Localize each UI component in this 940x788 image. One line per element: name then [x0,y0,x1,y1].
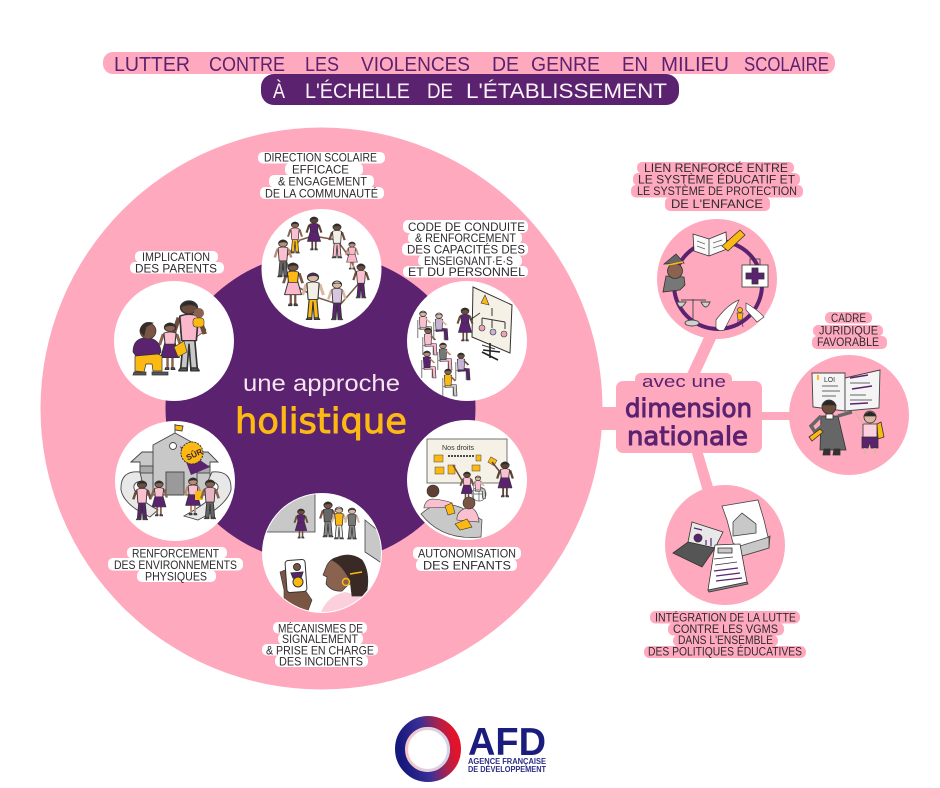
label: lien renforce: DE L'ENFANCE [671,199,763,211]
title line 2: DE [427,80,453,103]
title [103,52,835,105]
title line 2: L'ÉCHELLE [305,80,410,103]
label: cadre juridique favorable: FAVORABLE [817,337,879,349]
label: integration de la lutte: INTÉGRATION DE LA LUTTE [655,612,796,624]
label: code de conduite: ET DU PERSONNEL [408,267,526,279]
title line 1: LUTTER [114,54,190,76]
seated parent [133,322,168,375]
icon: laptop [673,522,723,567]
label: lien renforce: LE SYSTÈME ÉDUCATIF ET [638,174,795,186]
heading: dimension: dimension [625,394,752,424]
illustration: reporting by phone [262,493,382,613]
large pink circle [40,128,602,690]
label: integration de la lutte: DANS L'ENSEMBLE [678,635,773,647]
label: mecanismes de signalement [262,622,378,668]
label: autonomisation des enfants: DES ENFANTS [423,560,511,572]
label: integration de la lutte: CONTRE LES VGMS [673,624,778,636]
illustration: circle of people [262,209,382,329]
title line 1: SCOLAIRE [744,54,829,76]
icon: scroll with school [722,500,770,556]
label: code de conduite: CODE DE CONDUITE [408,222,525,234]
label: direction scolaire: DIRECTION SCOLAIRE [264,152,377,164]
connectors to national dimension [595,335,795,492]
title line 2: L'ÉTABLISSEMENT [466,80,667,103]
label: mecanismes de signalement: & PRISE EN CHARGE [266,646,374,658]
badge text: SÛR [185,447,204,462]
child [855,411,884,454]
heading: nationale: nationale [627,422,748,452]
label: renforcement des environnements physiques: DES ENVIRONNEMENTS [114,560,237,572]
title line 1: LES [305,54,339,76]
icon: report [708,544,748,592]
title line 1: EN [622,54,648,76]
heading: une approche: une approche [243,370,400,396]
illustration: safe school with hands [115,421,235,541]
phone [285,559,307,593]
label: lien renforce [631,162,803,211]
label: mecanismes de signalement: DES INCIDENTS [279,656,363,668]
label: code de conduite [402,220,528,279]
title line 1: MILIEU [661,54,729,76]
icon: open book and pencil [693,230,745,256]
title line 1: VIOLENCES [361,54,470,76]
illustration: training in front of a board [407,281,527,401]
label: renforcement des environnements physiques: PHYSIQUES [145,572,207,584]
title line 1: DE [492,54,519,76]
label: mecanismes de signalement: SIGNALEMENT [282,634,358,646]
board text: Nos droits [442,445,475,452]
label: implication des parents [130,251,224,276]
label: lien renforce: LIEN RENFORCÉ ENTRE [644,162,788,175]
label: cadre juridique favorable: JURIDIQUE [819,326,878,338]
logo: AFD: AFD [468,721,546,764]
label: direction scolaire: & ENGAGEMENT [278,176,367,188]
label: cadre juridique favorable: CADRE [831,313,866,325]
judge [809,400,852,455]
icon: protective hands and child [716,300,764,331]
label: renforcement des environnements physiques [108,547,243,584]
illustration: parents with children [114,281,234,401]
label: integration de la lutte [644,611,806,658]
label: cadre juridique favorable [812,312,887,349]
woman with braids [323,555,368,596]
label: direction scolaire: DE LA COMMUNAUTÉ [265,188,378,200]
label: direction scolaire: EFFICACE [292,164,349,176]
label: autonomisation des enfants [413,547,521,572]
icon: medical kit [742,259,768,287]
illustration: education policies documents [665,485,785,605]
heading: holistique: holistique [235,402,407,442]
label: mecanismes de signalement: MÉCANISMES DE [278,622,363,636]
title line 2 [261,74,679,105]
logo: AFD: DE DÉVELOPPEMENT [468,765,546,774]
heading: avec une: avec une [642,372,726,391]
label: code de conduite: DES CAPACITÉS DES [407,244,525,256]
icon: scales of justice [677,299,710,326]
logo: AFD: AGENCE FRANÇAISE [468,757,547,766]
illustration: children's rights board [407,420,527,540]
title line 1: CONTRE [209,54,285,76]
title line 1: GENRE [531,54,600,76]
icon: police officer [663,254,685,292]
title line 2: À [273,80,285,103]
label: code de conduite: & RENFORCEMENT [415,233,516,245]
label: direction scolaire [258,152,385,200]
label: implication des parents: DES PARENTS [135,264,217,276]
label: autonomisation des enfants: AUTONOMISATION [418,548,516,560]
illustration: legal framework [789,355,909,475]
label: code de conduite: ENSEIGNANT·E·S [424,256,513,268]
label: lien renforce: LE SYSTÈME DE PROTECTION [637,185,797,198]
logo: AFD [400,721,547,776]
purple centre circle [166,253,476,563]
title line 1 [103,52,835,76]
panel: holistic approach circle [40,128,602,690]
label: integration de la lutte: DES POLITIQUES ÉDUCATIVES [648,646,802,658]
label: renforcement des environnements physiques: RENFORCEMENT [132,548,219,560]
panel: national dimension box [616,372,762,453]
law book title: LOI [824,377,835,384]
label: implication des parents: IMPLICATION [142,252,210,264]
illustration: education and protection link [657,219,777,339]
